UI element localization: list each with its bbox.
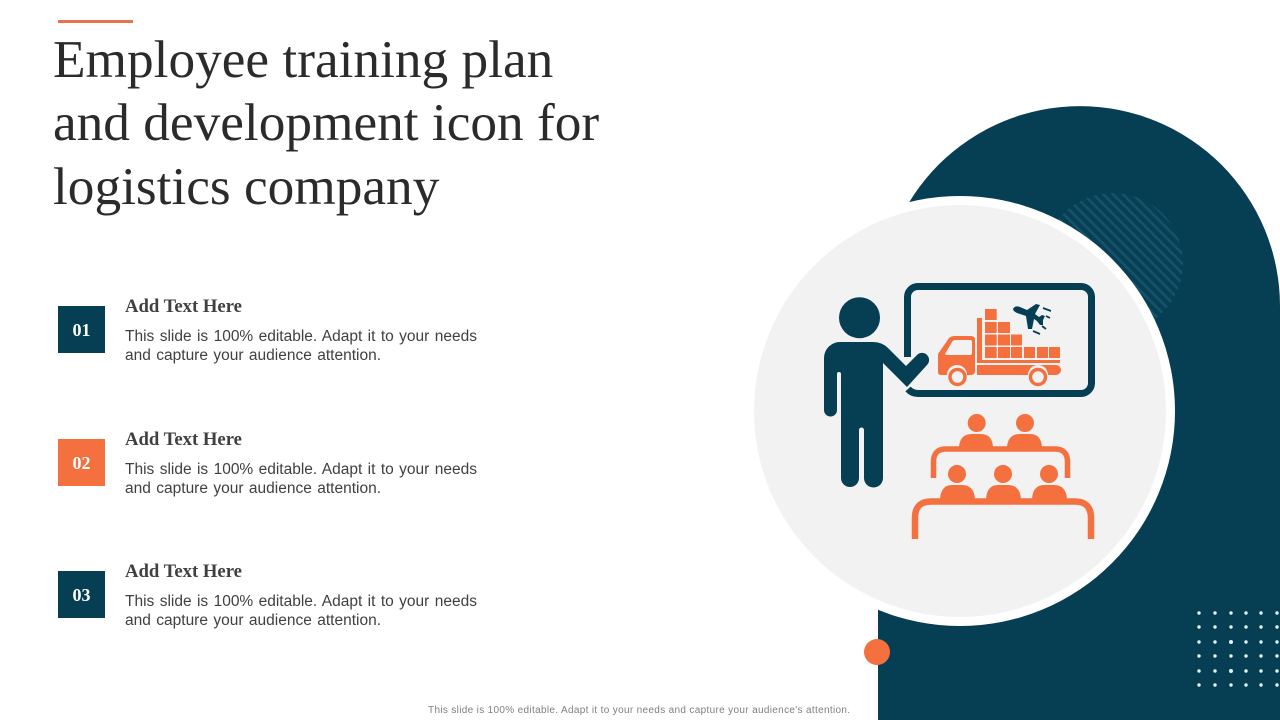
icon: audience front row [915, 465, 1091, 539]
title: Employee training plan [53, 30, 553, 88]
list item 03 [58, 561, 477, 629]
list item 01 [58, 296, 477, 364]
footer note: This slide is 100% editable. Adapt it to your needs and capture your audience's attention. [428, 704, 850, 716]
icon: audience back row [934, 414, 1068, 478]
item description [125, 328, 477, 364]
badge 02 [58, 439, 105, 486]
item description: and capture your audience attention. [125, 347, 381, 364]
striped circle [1043, 193, 1183, 333]
icon: presentation board [908, 286, 1092, 394]
badge 02: 02 [72, 453, 90, 473]
icon: delivery truck [938, 309, 1061, 384]
icon: airplane [1013, 304, 1051, 334]
item description [125, 461, 477, 497]
item heading: Add Text Here [125, 561, 242, 582]
item heading: Add Text Here [125, 429, 242, 450]
item description: This slide is 100% editable. Adapt it to your needs [125, 461, 477, 478]
item description: This slide is 100% editable. Adapt it to your needs [125, 328, 477, 345]
dot grid [1197, 611, 1279, 687]
dark arch panel [878, 106, 1280, 720]
accent line [58, 20, 133, 22]
badge 03 [58, 571, 105, 618]
title [53, 30, 599, 216]
item description [125, 593, 477, 629]
orange dot [864, 639, 890, 665]
badge 01 [58, 306, 105, 353]
title: logistics company [53, 156, 439, 216]
badge 03: 03 [72, 585, 90, 605]
item description: and capture your audience attention. [125, 612, 381, 629]
icon: presenter [824, 297, 929, 488]
item description: This slide is 100% editable. Adapt it to your needs [125, 593, 477, 610]
item heading: Add Text Here [125, 296, 242, 317]
badge 01: 01 [72, 320, 90, 340]
item description: and capture your audience attention. [125, 480, 381, 497]
white ring and grey circle [745, 196, 1175, 626]
title: and development icon for [53, 93, 599, 152]
list item 02 [58, 429, 477, 497]
